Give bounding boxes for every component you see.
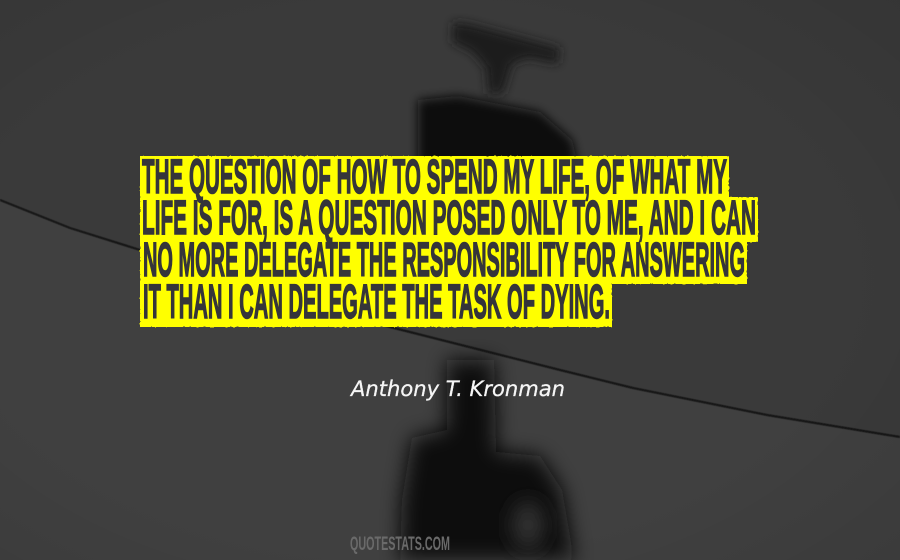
cymbal surface xyxy=(0,0,900,437)
blurred wing bolt xyxy=(418,22,578,165)
quote highlight and text xyxy=(140,151,758,329)
yellow highlight strips xyxy=(140,156,758,327)
watermark: QUOTESTATS.COM xyxy=(350,534,450,555)
author name: Anthony T. Kronman xyxy=(349,377,565,401)
cymbal edge line xyxy=(0,200,900,437)
quote text xyxy=(142,151,756,329)
blurred mount xyxy=(400,360,574,560)
